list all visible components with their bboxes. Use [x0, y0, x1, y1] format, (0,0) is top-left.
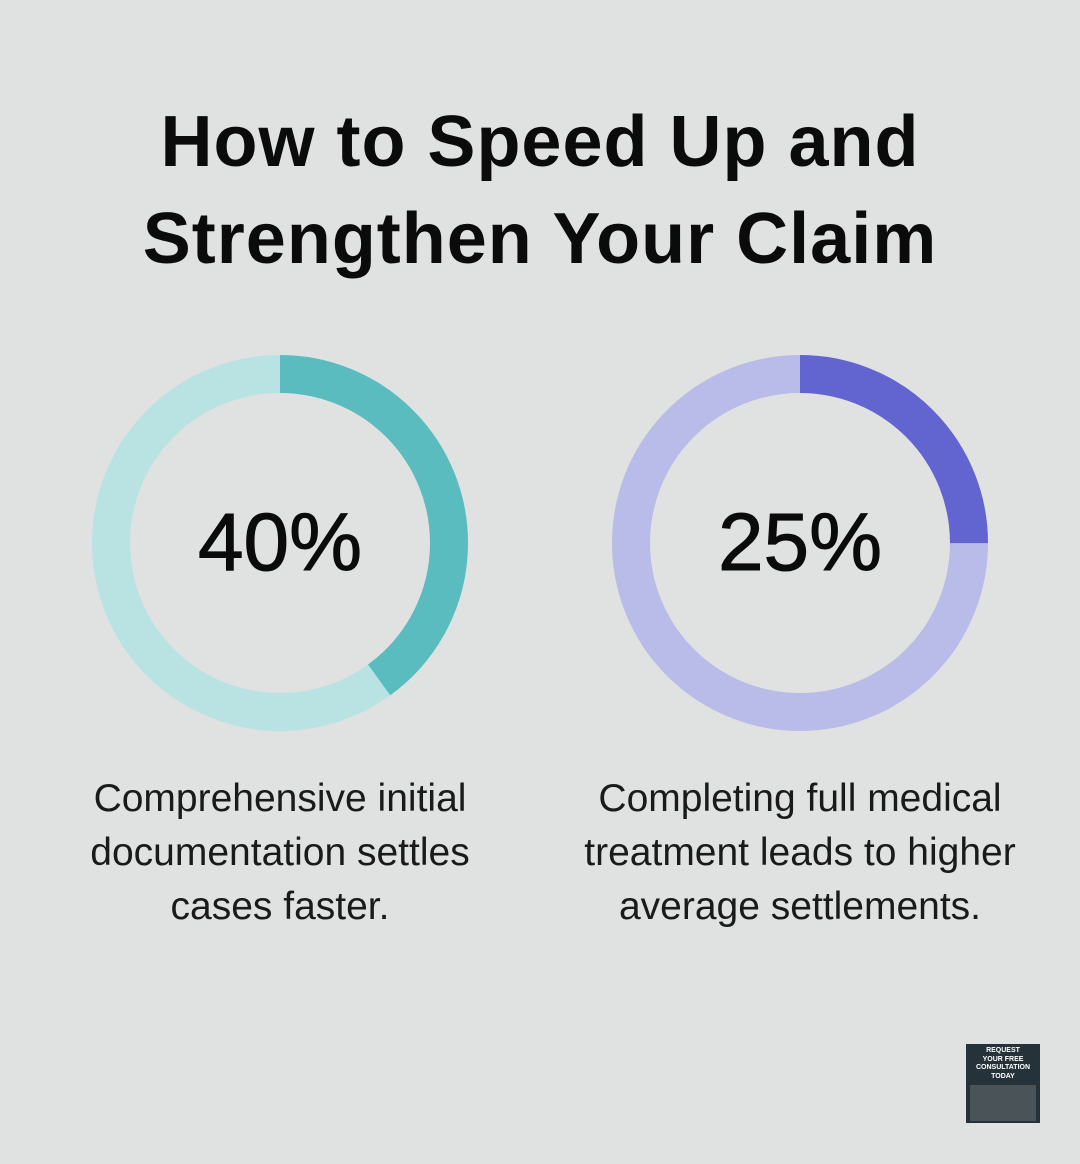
logo: consultation badge — [966, 1044, 1040, 1123]
title — [143, 102, 937, 279]
text: left description: Comprehensive initial documentation settles cases faster. — [90, 777, 470, 928]
text: right description: Completing full medical treatment leads to higher average settlements. — [584, 777, 1016, 928]
title: Strengthen Your Claim — [143, 199, 937, 279]
donut: 25%: 25% — [718, 497, 882, 588]
logo: consultation badge: TODAY — [991, 1072, 1015, 1080]
donut: 25% — [631, 374, 969, 712]
logo: consultation badge: CONSULTATION — [976, 1064, 1030, 1071]
logo: consultation badge: YOUR FREE — [983, 1056, 1023, 1062]
title: How to Speed Up and — [160, 102, 920, 182]
donut: 40%: 40% — [198, 497, 362, 588]
logo: consultation badge: REQUEST — [986, 1047, 1020, 1054]
donut charts — [92, 355, 988, 731]
donut: 40% — [111, 374, 449, 712]
